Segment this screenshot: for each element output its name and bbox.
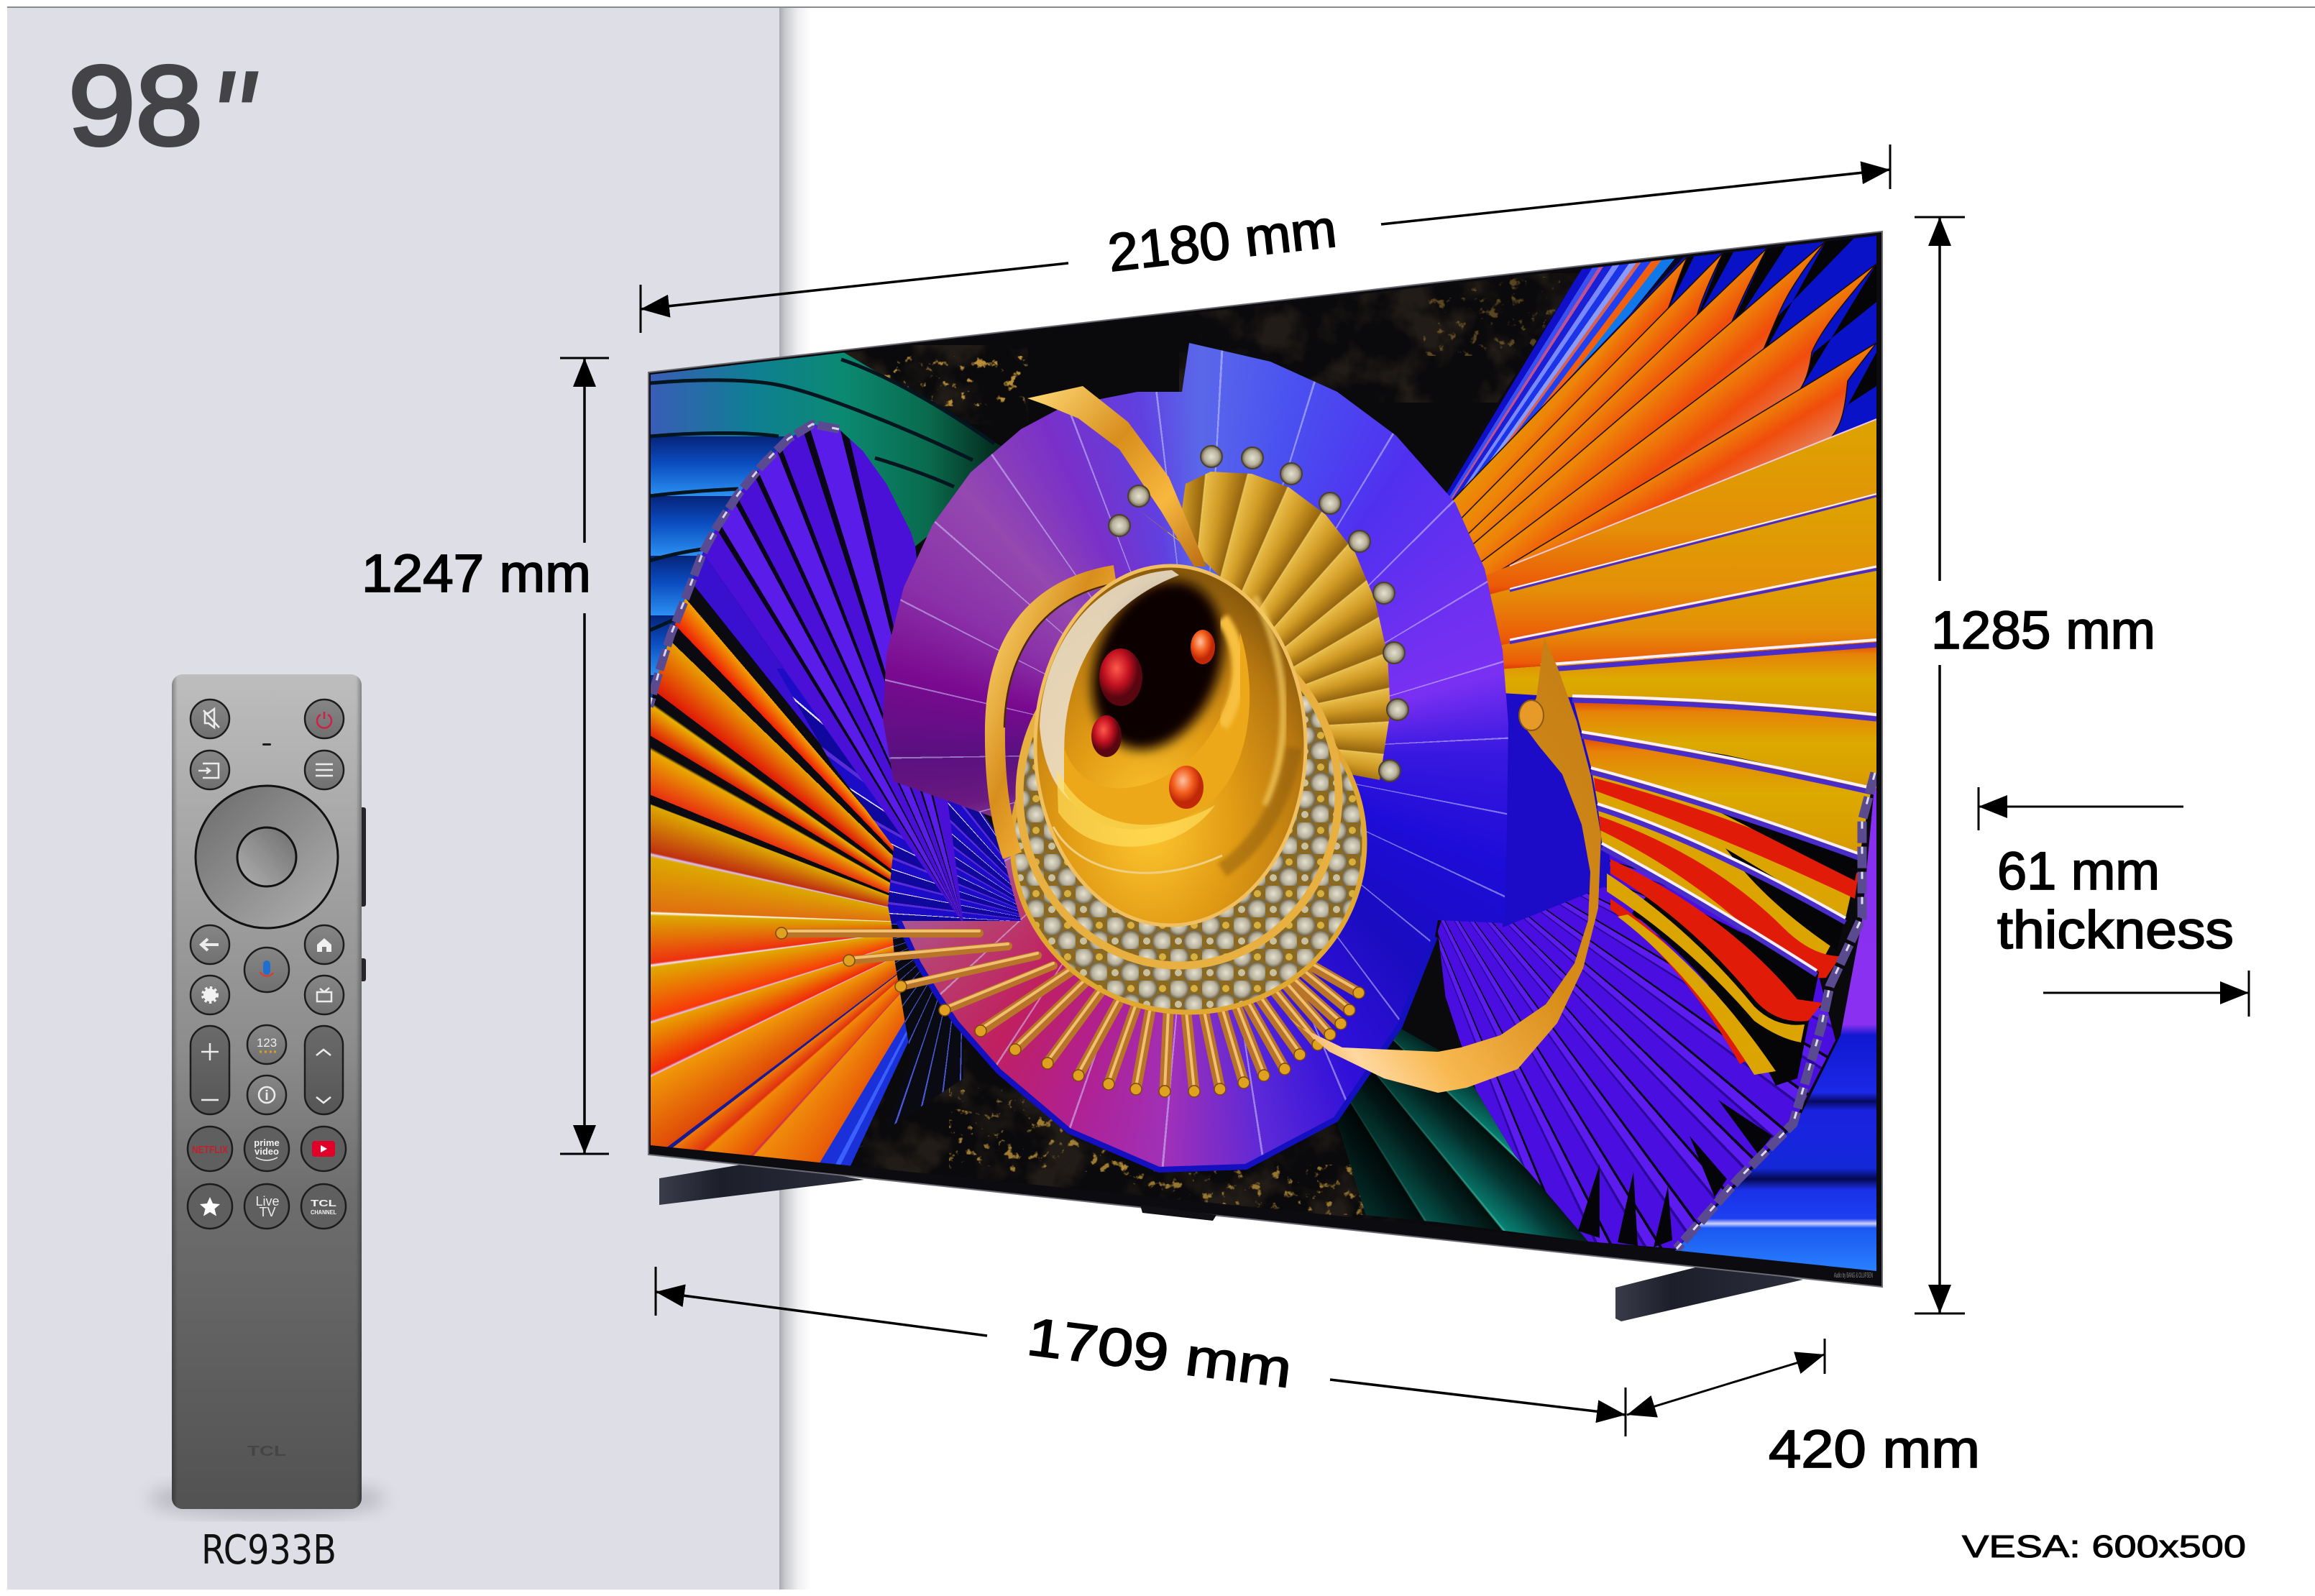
band divider lines white xyxy=(1510,419,1876,971)
stone texture lower xyxy=(863,1050,1409,1222)
disc blue rim xyxy=(899,921,1435,1170)
centre sensor tab xyxy=(1140,1205,1216,1221)
power icon xyxy=(317,712,331,728)
buttons: round grey keys xyxy=(191,700,344,1114)
Prime Video label: video xyxy=(255,1146,279,1157)
remote shadow xyxy=(148,1480,385,1518)
directional pad xyxy=(196,786,338,928)
app keys xyxy=(188,1127,346,1229)
TCL Channel label: CHANNEL xyxy=(311,1209,336,1216)
123 key label: 123 xyxy=(257,1036,277,1050)
TCL Channel label xyxy=(311,1198,336,1216)
orange feathers xyxy=(1452,242,1876,575)
arrow: thickness left xyxy=(1979,787,2183,830)
info key label: i xyxy=(265,1088,269,1104)
heading: screen size: " xyxy=(208,43,258,196)
top rule xyxy=(7,6,2315,8)
label: VESA: VESA: 600x500 xyxy=(1962,1529,2246,1564)
settings icon xyxy=(203,989,216,1001)
stone texture upper right xyxy=(1179,273,1582,403)
glass sphere xyxy=(1035,561,1306,925)
Live TV label xyxy=(255,1194,280,1219)
arrow: overall width 2180 mm xyxy=(641,145,1890,333)
red and black band strips xyxy=(1594,778,1860,1086)
gold flecks upper middle xyxy=(1424,277,1560,356)
TV frame xyxy=(648,231,1882,1287)
artwork: lower-right purple feather xyxy=(1438,854,1835,1249)
arrow: panel height 1247 mm xyxy=(560,358,609,1154)
gold left ring ribbon xyxy=(995,575,1115,856)
artwork: right fan feathers and bands xyxy=(1452,236,1876,1247)
remote body xyxy=(172,674,362,1509)
YouTube icon xyxy=(312,1141,335,1157)
black wedges xyxy=(1666,237,1876,412)
TV stands and bezel: Audio by BANG & OLUFSEN xyxy=(1834,1272,1873,1280)
TV screen artwork xyxy=(651,236,1876,1271)
right stand xyxy=(1615,1265,1803,1321)
teal upper band xyxy=(649,351,1007,546)
golden bands xyxy=(1467,419,1878,971)
rod ball caps xyxy=(776,927,1365,1097)
mic slot xyxy=(262,743,271,746)
Live TV label: TV xyxy=(259,1205,276,1219)
gold rods xyxy=(781,931,1359,1091)
label: 61 mm thickness: 61 mm xyxy=(1997,841,2160,901)
gold flecks lower xyxy=(949,1086,1155,1172)
remote TCL logo: TCL xyxy=(247,1444,286,1459)
bezel logo: TCL xyxy=(1165,1205,1178,1212)
remote model label: RC933B xyxy=(201,1527,336,1574)
purple feather black tips xyxy=(1578,1100,1772,1247)
gold upper ribbon xyxy=(1027,386,1206,567)
mic icon xyxy=(260,960,273,976)
gold flecks upper xyxy=(884,356,1028,406)
artwork: bottom teal fan xyxy=(1337,1029,1587,1242)
panel shadow edge xyxy=(779,7,811,1590)
label: 1285 mm: 1285 mm xyxy=(1931,600,2155,660)
Netflix label: NETFLIX xyxy=(192,1144,228,1156)
label: 61 mm thickness xyxy=(1997,841,2234,960)
blue lower bands xyxy=(651,436,785,697)
arrow: overall height 1285 mm xyxy=(1915,217,1965,1313)
stone texture upper left xyxy=(841,345,1028,424)
panel: left grey remote panel xyxy=(7,7,779,1590)
arrow: thickness right xyxy=(2043,971,2249,1017)
blue base behind feathers xyxy=(1540,236,1876,436)
label: 2180 mm: 2180 mm xyxy=(1105,198,1339,283)
Prime Video label: prime xyxy=(254,1137,280,1148)
star icon xyxy=(200,1197,220,1216)
heading: screen size xyxy=(68,43,258,196)
gold big right ribbon xyxy=(1288,638,1601,1093)
band divider lines purple xyxy=(1510,496,1876,975)
arrow: stand span 1709 mm xyxy=(656,1267,1626,1436)
heading: screen size: 98 xyxy=(68,43,203,169)
label: 1247 mm: 1247 mm xyxy=(362,544,591,603)
diamond ring xyxy=(1012,623,1365,1012)
arc lines xyxy=(649,359,994,630)
left stand xyxy=(659,1162,864,1205)
Prime Video label xyxy=(254,1137,280,1160)
label: 1709 mm: 1709 mm xyxy=(1024,1306,1296,1399)
gold flecks lower middle xyxy=(1122,1165,1366,1215)
artwork: teal arcs, blue arcs and stone texture xyxy=(651,273,1575,1221)
label: 61 mm thickness: thickness xyxy=(1997,900,2234,960)
purple blue area left of ribbon xyxy=(1503,683,1610,927)
key icons xyxy=(198,709,333,1103)
fan tip diamonds xyxy=(1109,446,1408,781)
artwork: right edge blue sweep xyxy=(1675,788,1876,1271)
volume and channel rockers xyxy=(191,1026,343,1114)
label: 420 mm: 420 mm xyxy=(1769,1419,1980,1479)
home icon xyxy=(317,938,331,952)
TCL Channel label: TCL xyxy=(311,1198,336,1209)
artwork: right fan thin blue rays xyxy=(1447,257,1684,500)
side buttons xyxy=(359,807,366,981)
Live TV label: Live xyxy=(255,1194,280,1209)
arrow: stand depth 420 mm xyxy=(1627,1339,1825,1415)
